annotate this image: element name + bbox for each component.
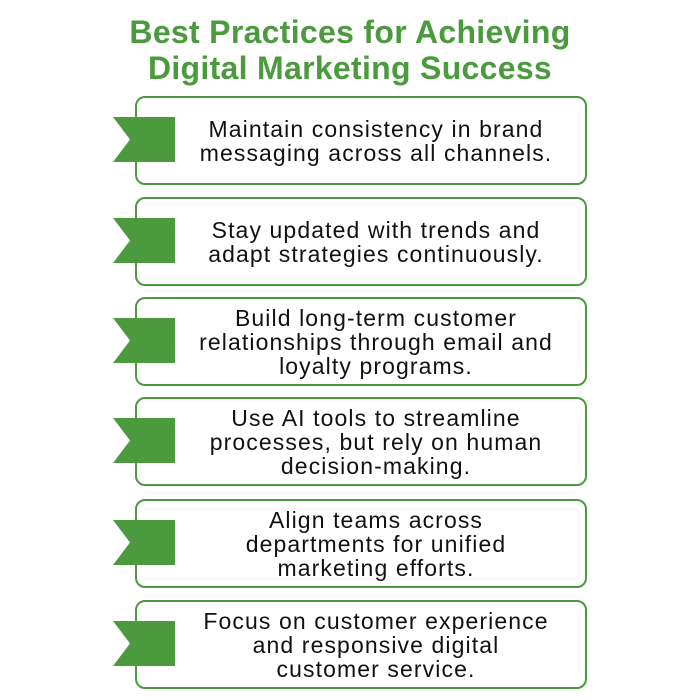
panel: item 2: Stay updated with trends and (212, 216, 540, 242)
panel: item 3 (135, 297, 587, 386)
panel: item 5: Align teams across (269, 506, 483, 532)
panel: item 1: Maintain consistency in brand (209, 116, 543, 142)
panel: item 4: Use AI tools to streamline (231, 404, 521, 430)
panel: item 5: marketing efforts. (277, 554, 475, 580)
icon: ribbon 4 (113, 418, 175, 463)
panel: item 1 (135, 96, 587, 185)
title (129, 14, 571, 86)
title: Best Practices for Achieving (129, 14, 571, 50)
title: Digital Marketing Success (148, 50, 552, 86)
panel: item 3: loyalty programs. (279, 352, 473, 378)
panel: item 3: relationships through email and (199, 328, 553, 354)
panel: item 3: Build long-term customer (235, 304, 517, 330)
panel: item 1: messaging across all channels. (200, 140, 552, 166)
panel: item 4: processes, but rely on human (210, 428, 542, 454)
icon: ribbon 1 (113, 117, 175, 162)
panel: item 4 (135, 397, 587, 486)
panel: item 6: and responsive digital (253, 632, 499, 658)
panel: item 6: customer service. (277, 656, 475, 682)
panel: item 4: decision-making. (281, 452, 471, 478)
panel: item 2: adapt strategies continuously. (208, 240, 544, 266)
icon: ribbon 2 (113, 218, 175, 263)
icon: ribbon 5 (113, 520, 175, 565)
panel: item 5 (135, 499, 587, 588)
icon: ribbon 6 (113, 621, 175, 666)
icon: ribbon 3 (113, 318, 175, 363)
panel: item 5: departments for unified (246, 530, 506, 556)
panel: item 2 (135, 197, 587, 286)
panel: item 6: Focus on customer experience (203, 608, 549, 634)
panel: item 6 (135, 600, 587, 689)
